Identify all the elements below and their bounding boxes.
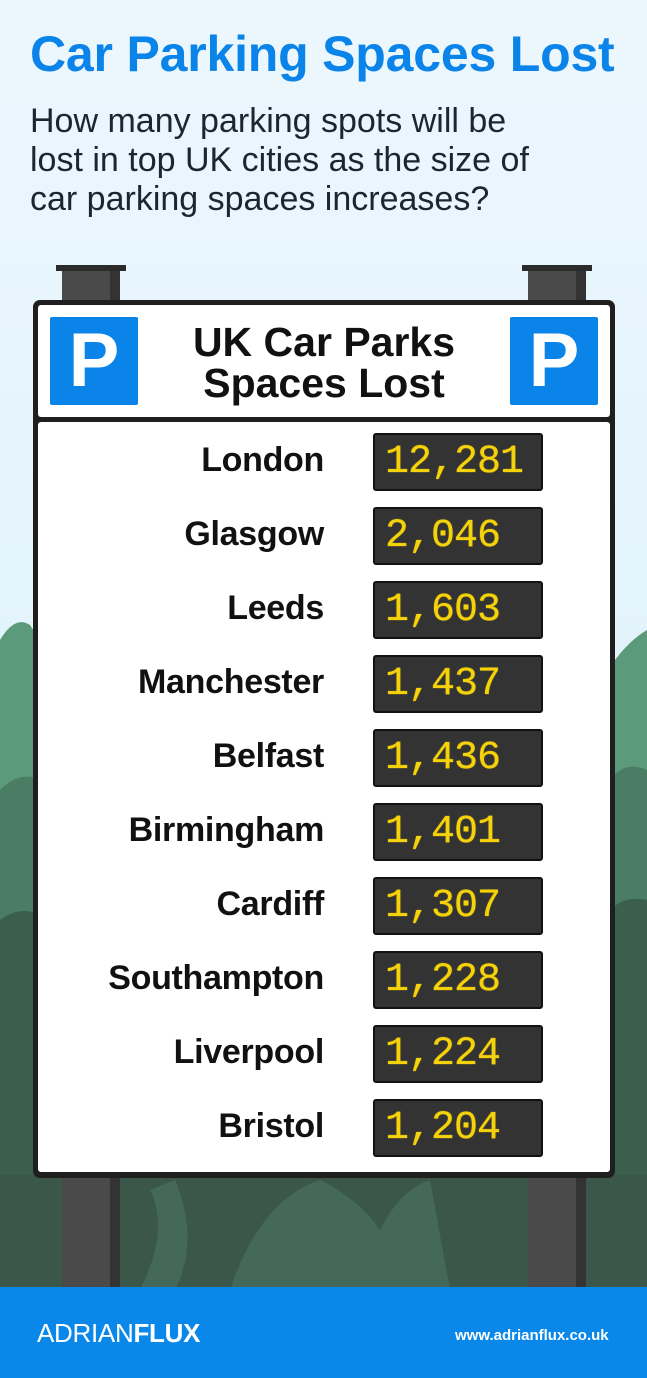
row: London (201, 433, 543, 491)
row: Belfast: 1,436 (385, 736, 500, 781)
row: Glasgow: 2,046 (385, 514, 500, 559)
row: Belfast (213, 729, 543, 787)
row: Leeds (227, 581, 543, 639)
subtitle: car parking spaces increases? (30, 180, 489, 218)
row: Leeds: Leeds (227, 589, 324, 627)
row: Manchester: 1,437 (385, 662, 500, 707)
row: Bristol: Bristol (218, 1107, 324, 1145)
row: Glasgow (184, 507, 543, 565)
logo: ADRIANFLUX (37, 1318, 200, 1348)
row: Bristol: 1,204 (385, 1106, 500, 1151)
sign heading (193, 319, 455, 406)
row: Cardiff (217, 877, 543, 935)
icon: parking P left: P (69, 318, 119, 403)
row: Manchester: Manchester (138, 663, 324, 701)
icon: parking P right: P (529, 318, 579, 403)
sign heading: Spaces Lost (203, 360, 445, 406)
row: Liverpool (174, 1025, 543, 1083)
row: Bristol (218, 1099, 543, 1157)
row: London: London (201, 441, 324, 479)
icon: parking P left (50, 317, 138, 405)
sign header (38, 305, 610, 417)
subtitle: lost in top UK cities as the size of (30, 141, 529, 179)
subtitle (30, 102, 529, 218)
footer (0, 1287, 647, 1378)
row: Birmingham: 1,401 (385, 810, 500, 855)
row: Cardiff: 1,307 (385, 884, 500, 929)
row: Leeds: 1,603 (385, 588, 500, 633)
sign board (33, 300, 615, 1178)
subtitle: How many parking spots will be (30, 102, 506, 140)
website url: www.adrianflux.co.uk (455, 1327, 609, 1344)
sign body: city list (38, 422, 610, 1172)
icon: parking P right (510, 317, 598, 405)
row: Glasgow: Glasgow (184, 515, 324, 553)
row: Liverpool: Liverpool (174, 1033, 324, 1071)
row: Birmingham: Birmingham (129, 811, 324, 849)
row: Cardiff: Cardiff (217, 885, 324, 923)
row: London: 12,281 (385, 440, 523, 485)
row: Liverpool: 1,224 (385, 1032, 500, 1077)
row: Belfast: Belfast (213, 737, 324, 775)
row: Birmingham (129, 803, 543, 861)
sign heading: UK Car Parks (193, 319, 455, 365)
row: Manchester (138, 655, 543, 713)
row: Southampton: 1,228 (385, 958, 500, 1003)
row: Southampton: Southampton (108, 959, 324, 997)
row: Southampton (108, 951, 543, 1009)
title: Car Parking Spaces Lost (30, 26, 615, 82)
